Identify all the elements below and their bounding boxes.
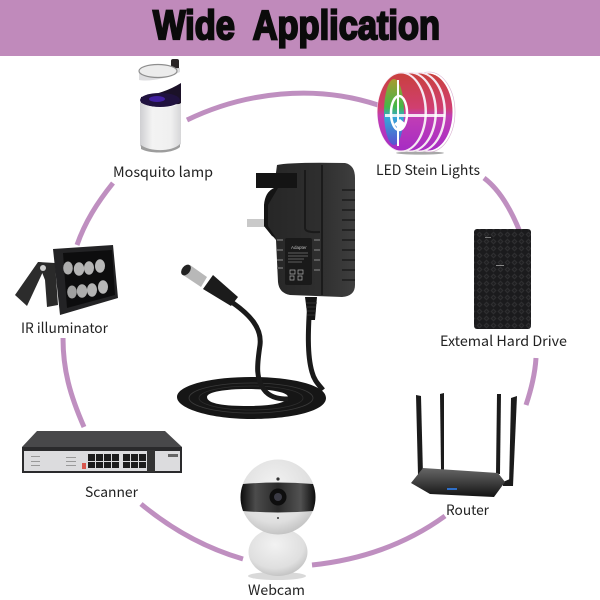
header banner [0, 0, 600, 56]
icon: mosquito lamp [139, 59, 181, 153]
label: external hard drive: Extemal Hard Drive [440, 331, 567, 351]
connecting ring of arcs [63, 93, 536, 565]
icon: power adapter [247, 163, 355, 320]
icon: router [411, 393, 517, 497]
label: LED strip lights: LED Stein Lights [376, 160, 480, 180]
icon: LED strip lights [377, 72, 455, 155]
icon: IR illuminator [15, 245, 118, 315]
icon: DC barrel plug [179, 263, 238, 306]
icon: external hard drive [474, 229, 531, 329]
label: webcam: Webcam [248, 580, 305, 600]
cable coil [177, 377, 326, 419]
cable from adapter [308, 300, 323, 390]
icon: network switch [22, 431, 182, 473]
icon: webcam [240, 460, 316, 580]
label: scanner: Scanner [85, 482, 139, 502]
label: IR illuminator: IR illuminator [21, 318, 109, 338]
icon: power adapter: Adapter [291, 245, 307, 250]
cable from barrel plug [233, 303, 288, 399]
label: mosquito lamp: Mosquito lamp [113, 162, 213, 182]
title: Wide Application [153, 2, 440, 48]
label: router: Router [446, 500, 490, 520]
